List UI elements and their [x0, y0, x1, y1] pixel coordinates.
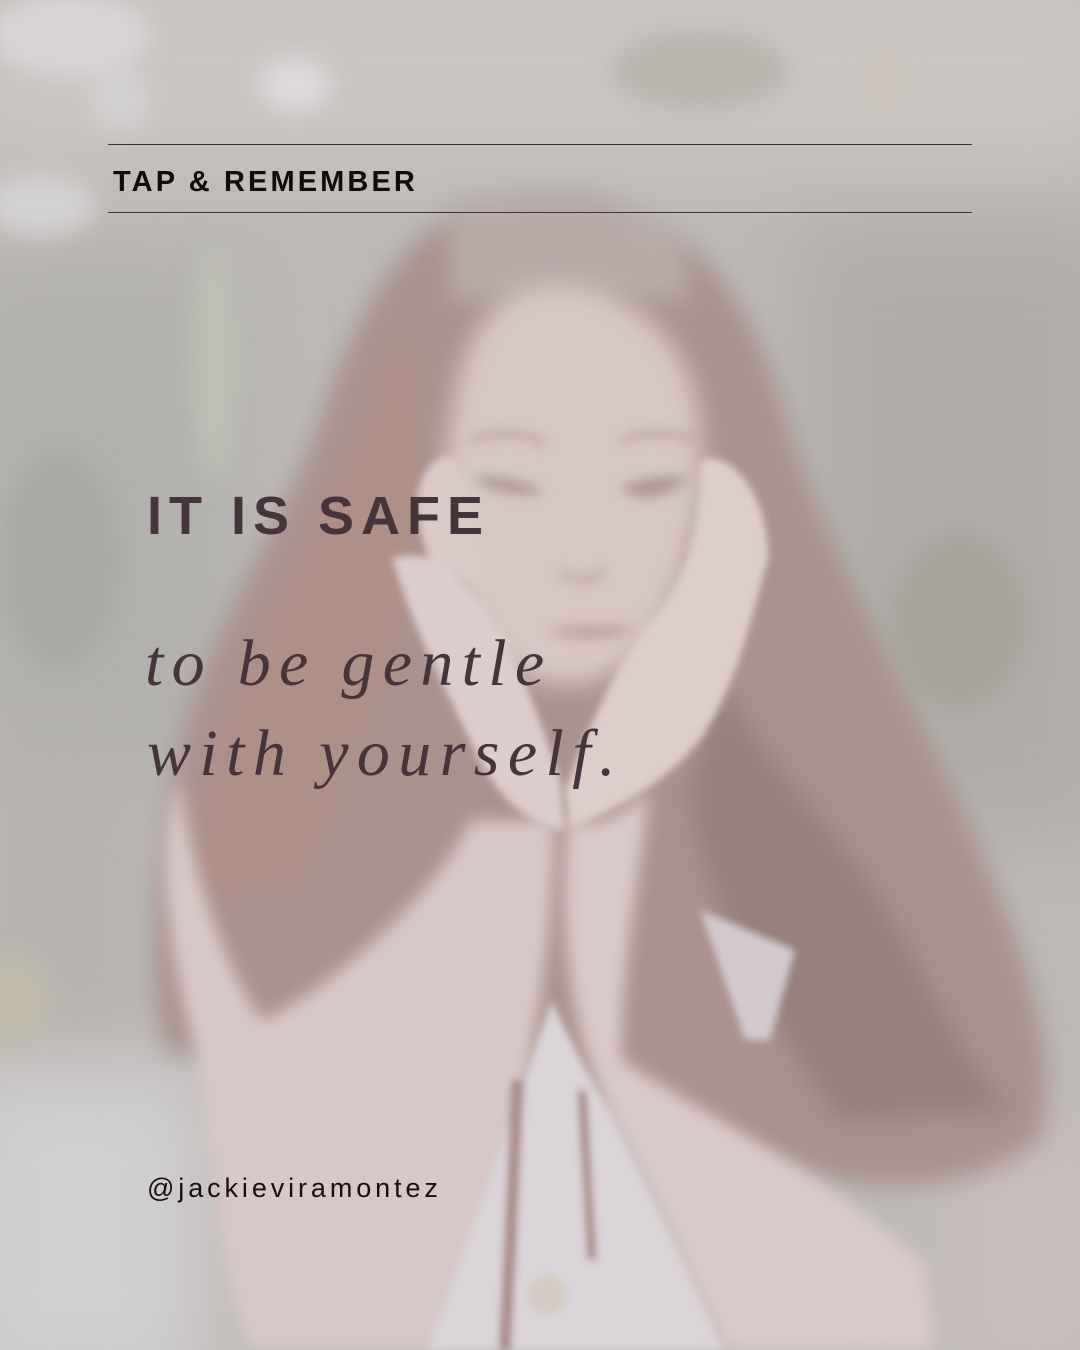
header label: TAP & REMEMBER — [113, 166, 418, 198]
shoulder and arm skin — [165, 780, 555, 1350]
hair — [155, 192, 1046, 1185]
handwritten line two: with yourself. — [147, 717, 624, 790]
bottom rule — [108, 212, 972, 213]
hands — [392, 456, 768, 830]
right forearm — [564, 790, 935, 1350]
handwritten line one: to be gentle — [145, 627, 552, 700]
top rule — [108, 144, 972, 145]
heading: IT IS SAFE — [147, 486, 490, 546]
handle: @jackieviramontez — [147, 1173, 442, 1203]
white patterned blouse — [428, 910, 795, 1350]
face — [444, 285, 702, 685]
